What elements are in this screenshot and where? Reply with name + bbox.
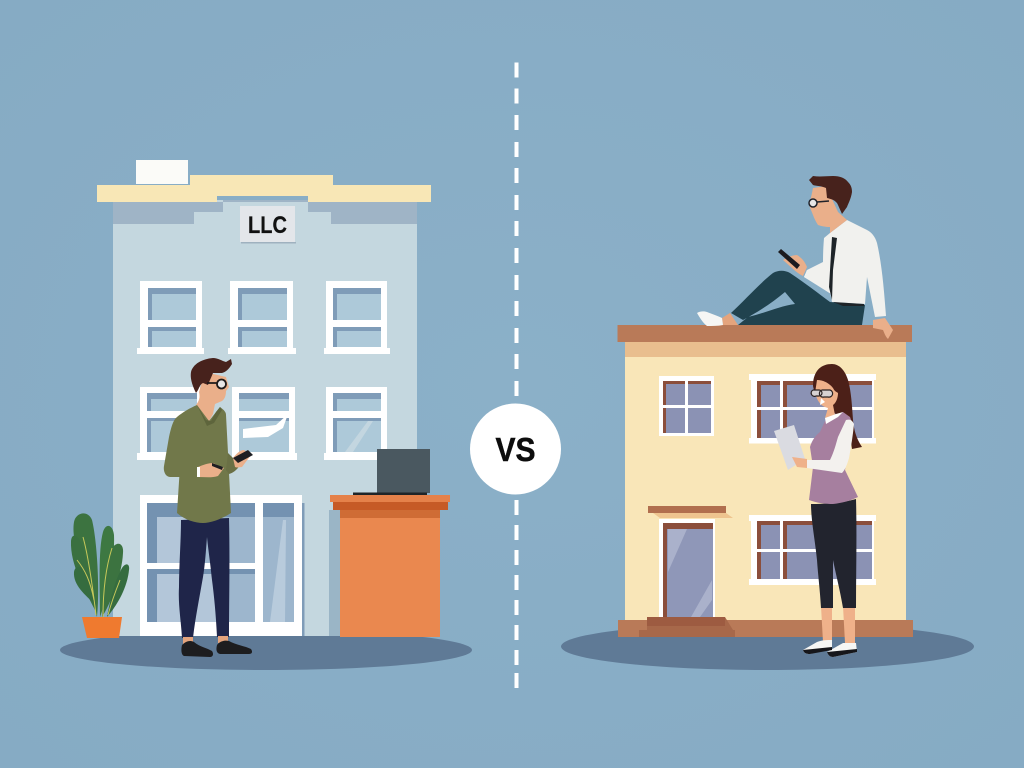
- roof unit: [136, 160, 188, 184]
- vest: [809, 412, 858, 504]
- figure: man with phone: [164, 358, 253, 657]
- panel: sole proprietor house: [618, 325, 913, 637]
- shirt: [804, 220, 886, 317]
- tie: [829, 237, 837, 300]
- upper wide window: [749, 374, 876, 444]
- right hand: [233, 450, 251, 467]
- hair: [191, 358, 232, 393]
- shoes: [803, 640, 857, 657]
- base: [618, 620, 913, 637]
- dashed divider: [514, 62, 518, 688]
- neck and face: [815, 380, 838, 418]
- figure: woman with document: [774, 364, 862, 657]
- lower legs: [821, 606, 855, 643]
- lower windows: [137, 387, 390, 460]
- leggings: [811, 499, 856, 608]
- left hand: [198, 463, 224, 477]
- cuff: [197, 467, 200, 477]
- glasses: [811, 390, 833, 397]
- face: [809, 186, 847, 233]
- icon: potted plant: [71, 513, 129, 638]
- collar: [825, 412, 843, 424]
- trousers: [731, 271, 865, 325]
- glasses: [207, 380, 226, 388]
- neck and face: [196, 372, 229, 421]
- phone: [778, 249, 800, 269]
- glasses: [809, 199, 829, 207]
- reception desk: [329, 495, 450, 637]
- ground shadow: right: [561, 623, 974, 670]
- forearm: [804, 262, 831, 294]
- panel: LLC office building: [97, 160, 450, 637]
- roof shadow band: [113, 200, 417, 224]
- laptop: [353, 449, 430, 495]
- lower wide window: [749, 515, 876, 585]
- steps: [639, 617, 735, 637]
- phone: [233, 450, 253, 463]
- hand on roof: [873, 318, 893, 339]
- document: [774, 425, 805, 470]
- VS badge: [470, 404, 561, 494]
- hand with phone: [783, 255, 807, 276]
- smile: [820, 398, 825, 405]
- small window: [659, 376, 714, 436]
- hair: [809, 176, 852, 214]
- LLC sign: [240, 206, 296, 244]
- shirt: [164, 405, 231, 523]
- shirt sleeve: [226, 453, 240, 474]
- figure: man sitting on roof: [697, 176, 893, 339]
- cream roof: [97, 175, 431, 202]
- upper windows: [137, 281, 390, 354]
- collar: [197, 405, 222, 426]
- VS badge: VS: [496, 431, 536, 468]
- LLC sign: LLC: [248, 212, 287, 239]
- hand: [792, 457, 807, 468]
- wall: [625, 357, 906, 620]
- shoes: [181, 641, 252, 657]
- building body: [113, 200, 417, 636]
- door canopy: [653, 513, 733, 518]
- ground shadow: left: [60, 630, 472, 670]
- pot: [82, 617, 122, 638]
- belt: [833, 302, 864, 306]
- back hair: [813, 364, 862, 449]
- ankles: [183, 636, 228, 644]
- sleeve: [807, 420, 854, 473]
- roof slab: [618, 325, 912, 342]
- shoe: [697, 311, 723, 326]
- door: [659, 519, 715, 619]
- fascia: [625, 342, 906, 357]
- trousers: [179, 518, 229, 638]
- ankle: [722, 313, 738, 325]
- entrance window: [140, 495, 304, 636]
